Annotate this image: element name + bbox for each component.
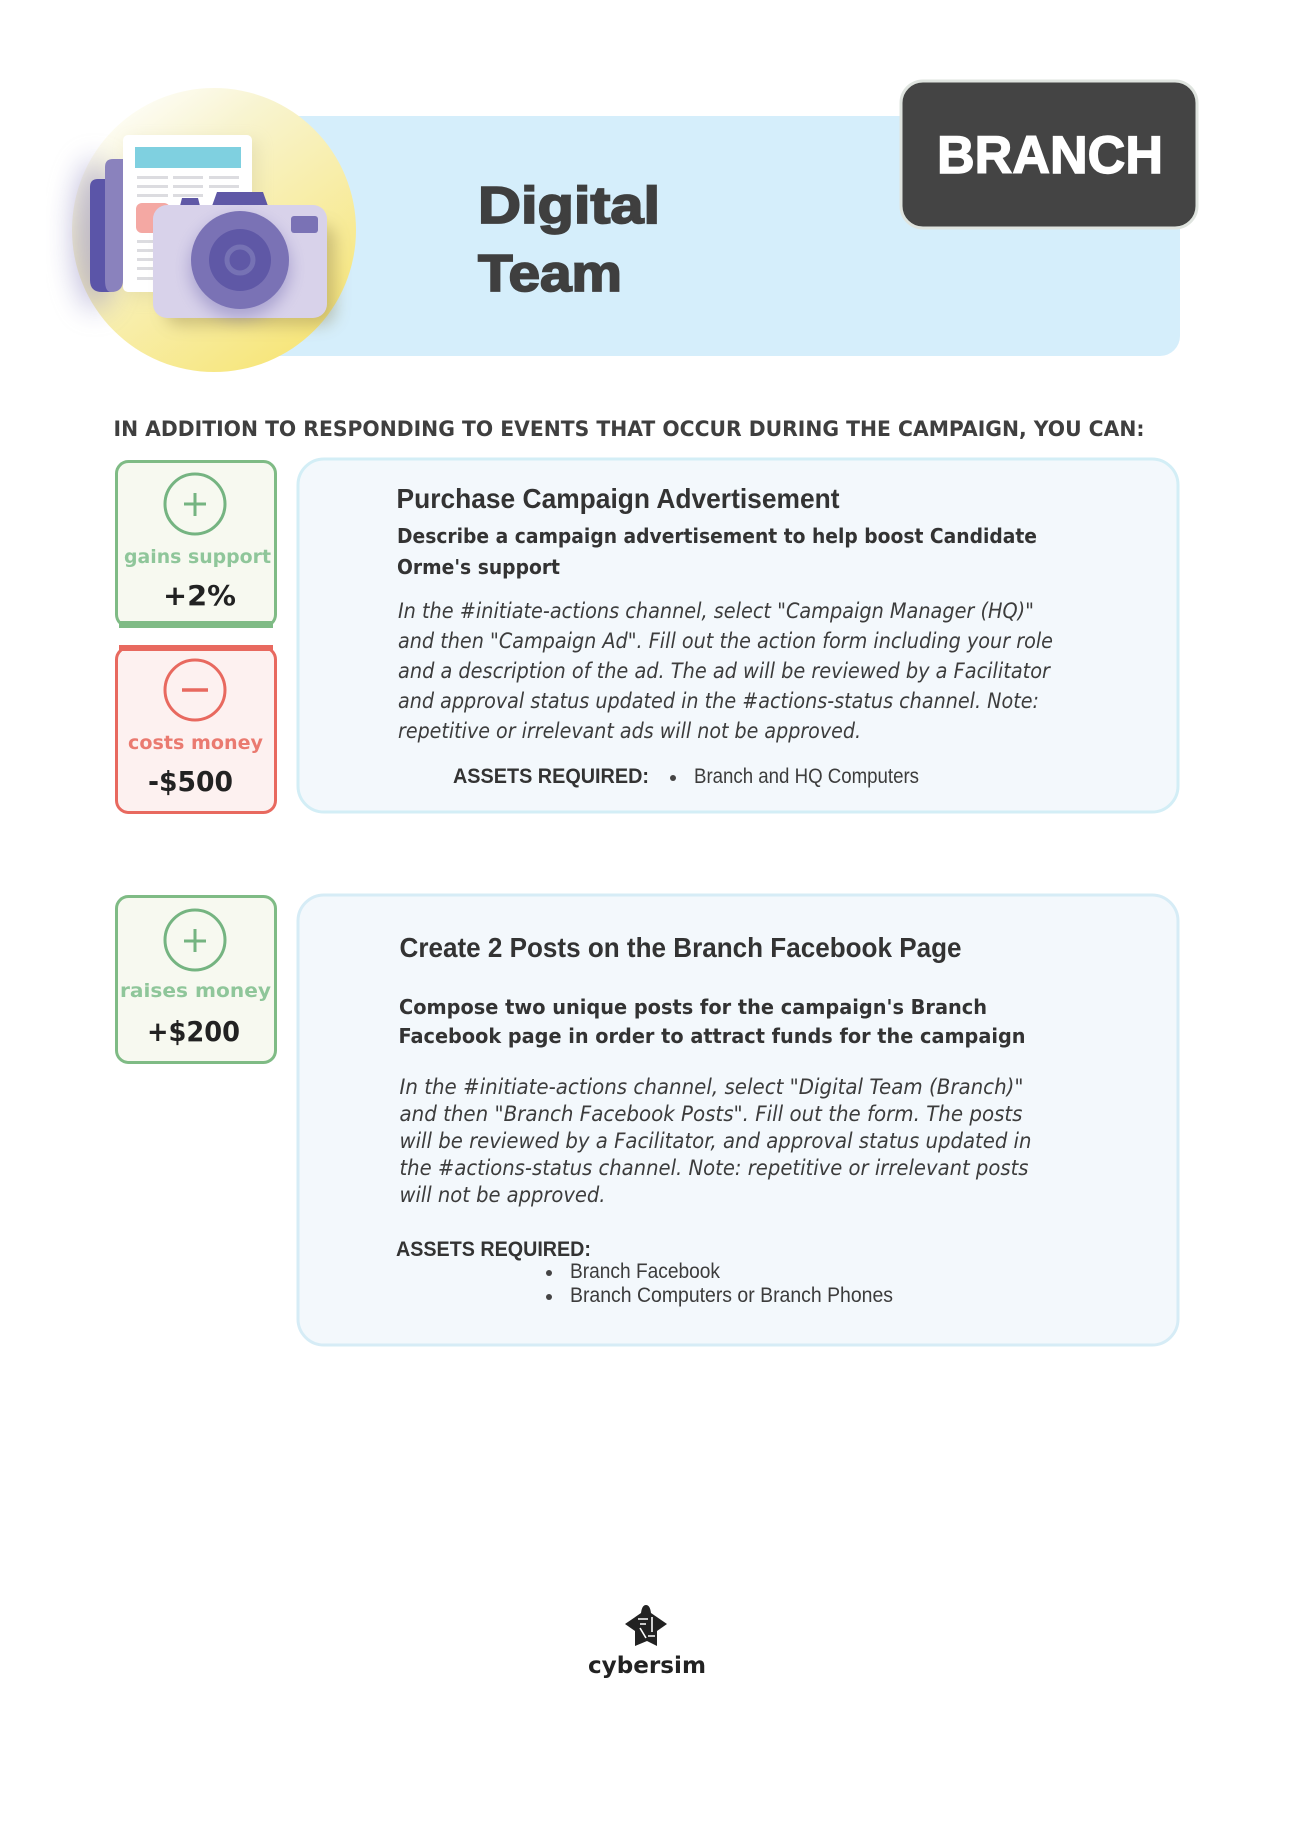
panel: branch facebook posts [298,895,1178,1345]
panel instructions [400,1075,1032,1207]
effect card: gains support: +2% [163,579,236,612]
icon: plus [165,910,225,970]
panel instructions: will not be approved. [400,1183,606,1207]
panel description [397,524,1037,579]
icon: camera and newspaper [72,88,356,372]
panel instructions: and then "Campaign Ad". Fill out the action form including your role [398,629,1053,653]
effect card: costs money: costs money [128,732,264,754]
assets required: ASSETS REQUIRED: [453,765,649,788]
effect card: raises money: raises money [120,980,272,1002]
icon: minus [165,660,225,720]
panel instructions: and a description of the ad. The ad will be reviewed by a Facilitator [398,659,1051,683]
assets required: Branch Facebook [570,1260,720,1283]
icon: turtle star [625,1605,667,1646]
icon: plus [165,474,225,534]
panel instructions: repetitive or irrelevant ads will not be approved. [398,719,861,743]
intro heading: IN ADDITION TO RESPONDING TO EVENTS THAT OCCUR DURING THE CAMPAIGN, YOU CAN: [114,417,1144,441]
panel instructions: and then "Branch Facebook Posts". Fill out the form. The posts [400,1102,1023,1126]
panel: purchase campaign advertisement: Purchase Campaign Advertisement [396,483,840,514]
branch badge: BRANCH [937,126,1163,185]
effect card: costs money [116,645,276,812]
branch badge [901,81,1197,228]
panel description [398,995,1026,1048]
panel instructions: the #actions-status channel. Note: repetitive or irrelevant posts [400,1156,1029,1180]
title: Digital [478,177,660,235]
panel instructions [398,599,1053,743]
panel description: Describe a campaign advertisement to help boost Candidate [397,524,1037,548]
logo: cybersim [588,1605,706,1679]
panel instructions: In the #initiate-actions channel, select "Campaign Manager (HQ)" [398,599,1034,623]
logo: cybersim: cybersim [588,1653,706,1679]
assets required: Branch and HQ Computers [694,765,919,788]
assets required [396,1238,893,1307]
effect card: gains support [116,462,276,628]
panel: branch facebook posts: Create 2 Posts on the Branch Facebook Page [400,932,962,963]
panel instructions: will be reviewed by a Facilitator, and approval status updated in [400,1129,1032,1153]
effect card: raises money: +$200 [147,1015,240,1048]
panel description: Compose two unique posts for the campaign's Branch [399,995,987,1019]
panel instructions: and approval status updated in the #actions-status channel. Note: [398,689,1039,713]
panel instructions: In the #initiate-actions channel, select "Digital Team (Branch)" [400,1075,1024,1099]
effect card: gains support: gains support [124,546,271,568]
panel description: Orme's support [397,555,560,579]
assets required: Branch Computers or Branch Phones [570,1284,893,1307]
title: Team [478,245,622,303]
header banner [230,116,1180,356]
panel: purchase campaign advertisement [298,459,1178,812]
effect card: raises money [116,896,276,1062]
assets required [453,765,919,788]
title [478,177,660,303]
assets required: ASSETS REQUIRED: [396,1238,591,1261]
effect card: costs money: -$500 [148,765,233,798]
panel description: Facebook page in order to attract funds for the campaign [398,1024,1026,1048]
